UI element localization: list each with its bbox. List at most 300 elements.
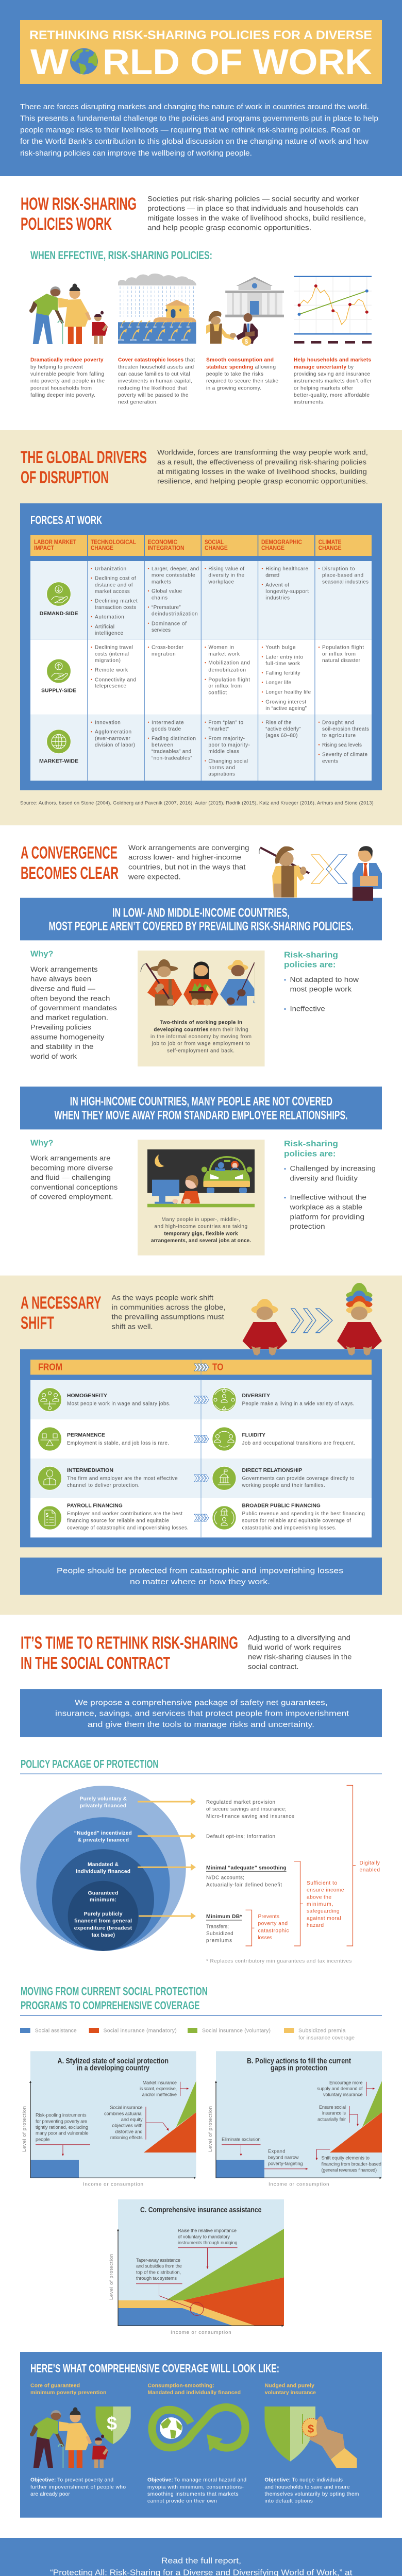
chart C: comprehensive insurance: top of the distribution, — [136, 2269, 181, 2275]
chart A: stylized state: is scant, expensive, — [140, 2086, 177, 2091]
icon: family and shield — [30, 2406, 131, 2468]
title banner: RETHINKING RISK-SHARING POLICIES FOR A DIVERSE — [29, 28, 372, 42]
icon: shield coin hand — [264, 2406, 357, 2468]
objective: core: are already poor — [30, 2492, 70, 2497]
cell: demographic market — [262, 720, 301, 739]
text: necessary shift intro — [111, 1294, 226, 1330]
cell: demographic demand: Advent of — [265, 582, 289, 588]
caption: informal economy: Two-thirds of working people in — [160, 1020, 242, 1026]
row: direct relationship: Governments can provide coverage directly to — [242, 1476, 355, 1481]
icon: bank and handshake — [206, 277, 284, 346]
text: high-income policies are: diversity and fluidity — [290, 1174, 358, 1182]
text: reduce poverty: vulnerable people from falling — [30, 371, 104, 377]
cell: technological market: division of labor) — [95, 742, 135, 748]
chart C: comprehensive insurance: Raise the relative importance — [178, 2228, 237, 2233]
text: high-income policies are — [284, 1140, 376, 1230]
chart B: policy actions — [208, 2051, 382, 2188]
text: policy instruments: Micro-finance saving and insurance — [206, 1814, 295, 1819]
objective: core: further impoverishment of people who — [30, 2484, 126, 2490]
heading: policy package: POLICY PACKAGE OF PROTECTION — [21, 1758, 159, 1771]
text: smooth consumption — [206, 358, 278, 391]
chart B: policy actions: (general revenues financed) — [322, 2167, 377, 2173]
chart A: stylized state: rationing effects — [110, 2135, 143, 2140]
caption: informal economy: earn their living — [210, 1027, 248, 1032]
row label: demand-side: DEMAND-SIDE — [40, 611, 78, 617]
diagram: nested ellipses: tax base) — [92, 1933, 115, 1938]
text: low-income policies are: Risk-sharing — [284, 951, 338, 959]
cell: economic market: Intermediate — [152, 720, 184, 725]
table header row: CLIMATE — [319, 539, 342, 546]
text: low-income policies are: Ineffective — [290, 1005, 325, 1012]
cell: economic supply: migration — [152, 651, 176, 657]
text: necessary shift intro: As the ways people work shift — [111, 1294, 213, 1301]
chart A: stylized state: objectives with — [112, 2123, 143, 2128]
heading: rethink risk-sharing: IT’S TIME TO RETHINK RISK-SHARING — [21, 1633, 238, 1653]
intro paragraph: risk-sharing policies can improve the wellbeing of working people. — [20, 149, 252, 158]
cell: technological supply: costs (internal — [95, 651, 129, 657]
text: manage uncertainty: manage uncertainty — [294, 364, 346, 370]
title banner: W — [30, 42, 69, 82]
brackets: coverage outcomes: Digitally — [360, 1860, 380, 1866]
text: reduce poverty: Dramatically reduce poverty — [30, 358, 104, 363]
text: smooth consumption: stabilize spending — [206, 364, 253, 370]
text: high-income policies are: policies are: — [284, 1149, 336, 1158]
cell: social demand: Rising value of — [208, 566, 244, 572]
icon: night gig scene — [147, 1149, 255, 1207]
cell: social market: norms and — [208, 765, 235, 771]
text: convergence intro: were expected. — [128, 873, 181, 880]
text: rethink intro: Adjusting to a diversifying and — [248, 1634, 350, 1641]
text: necessary shift intro: in communities across the globe, — [111, 1303, 226, 1311]
chart A: stylized state: and equity — [121, 2117, 143, 2122]
cell: technological demand: Artificial — [95, 624, 114, 630]
heading: a convergence: BECOMES CLEAR — [21, 863, 119, 883]
heading: global drivers: OF DISRUPTION — [21, 468, 109, 487]
cell: social supply: Population flight — [208, 677, 250, 683]
icon: infinity globe — [152, 2407, 245, 2451]
cell: economic market: “non-tradeables” — [152, 755, 192, 761]
diagram: nested ellipses: Guaranteed — [88, 1890, 118, 1896]
cell: social supply: Mobilization and — [208, 660, 250, 666]
brackets: coverage outcomes: enabled — [360, 1867, 380, 1873]
text: policy instruments: Actuarially-fair defined benefit — [206, 1882, 282, 1888]
cell: economic demand: services — [152, 628, 171, 633]
diagram: nested ellipses: “Nudged” incentivized — [74, 1831, 132, 1836]
cell: social supply — [205, 645, 250, 696]
heading: forces at work: FORCES AT WORK — [30, 514, 102, 527]
table header row: CHANGE — [205, 546, 228, 552]
row label: demand-side — [40, 582, 78, 617]
table header row: DEMOGRAPHIC — [261, 539, 302, 546]
text: high-income policies are: Challenged by increasing — [290, 1165, 376, 1173]
chart C: comprehensive insurance: of voluntary to mandatory — [178, 2234, 230, 2239]
chart A: stylized state: Social insurance — [110, 2105, 143, 2110]
callout: comprehensive package: insurance, savings, and services that protect people from impoverishment — [55, 1709, 349, 1718]
text: reduce poverty — [30, 358, 105, 398]
heading: a necessary shift: SHIFT — [21, 1313, 54, 1333]
text: manage uncertainty: or helping markets offer — [294, 385, 354, 391]
cell: technological demand: transaction costs — [95, 605, 136, 611]
heading: rethink risk-sharing: IN THE SOCIAL CONTRACT — [21, 1653, 170, 1673]
footnote: * Replaces contributory min guarantees and tax incentives — [206, 1958, 351, 1964]
caption: gig work: Many people in upper-, middle-, — [161, 1217, 240, 1223]
brackets: coverage outcomes: catastrophic — [258, 1928, 289, 1934]
cell: technological demand: Declining cost of — [95, 576, 136, 582]
footer background — [0, 2538, 402, 2576]
cell: climate supply — [319, 645, 364, 664]
cell: social market: From majority- — [208, 736, 245, 741]
caption: gig work: arrangements, and several jobs at once. — [151, 1238, 251, 1244]
text: global drivers intro: at mitigating losses in the wake of livelihood shocks, building — [157, 468, 367, 476]
cell: economic market: Fading distinction — [152, 736, 196, 741]
from to header: TO — [212, 1362, 224, 1372]
text: catastrophic losses: that — [185, 358, 195, 363]
chart A: stylized state: many poor and vulnerable — [36, 2131, 89, 2136]
text: policy instruments: N/DC accounts; — [206, 1875, 244, 1881]
diagram: nested ellipses: individually financed — [76, 1869, 130, 1874]
chart B: policy actions: poverty-targeting — [268, 2161, 303, 2166]
caption: informal economy: job to job or from wage employment to — [152, 1041, 250, 1047]
chart icon: uncertainty lines — [294, 276, 372, 344]
text: why low income: often beyond the reach — [30, 994, 110, 1002]
brackets: coverage outcomes: ensure income — [307, 1888, 344, 1893]
legend: Social insurance (voluntary) — [202, 2027, 271, 2033]
table header row: IMPACT — [34, 546, 54, 552]
brackets: coverage outcomes: hazard — [307, 1923, 324, 1928]
row: intermediation: INTERMEDIATION — [67, 1467, 113, 1473]
row: intermediation — [38, 1466, 178, 1490]
text: why high income: Why? — [30, 1139, 54, 1147]
cell: social demand: diversity in the — [208, 573, 244, 579]
icon: three informal workers — [141, 959, 255, 1006]
icon: shield coin hand: $ — [308, 2422, 314, 2435]
text: catastrophic losses: investments in human capital, — [118, 379, 192, 384]
intro paragraph: for the World Bank’s contribution to this global discussion on the changing nature of work and how — [20, 138, 369, 146]
brackets: coverage outcomes: minimum, — [307, 1902, 333, 1907]
objective: nudge: Objective: — [264, 2478, 291, 2483]
cell: social market: From “plan” to — [208, 720, 243, 725]
panel: from to table — [20, 1346, 382, 1547]
text: read the full report — [50, 2557, 353, 2576]
text: why high income: conventional conceptions — [30, 1183, 118, 1191]
cell: social market — [205, 720, 250, 777]
row: payroll financing: financing source for reliable and equitable — [67, 1518, 169, 1524]
diagram: nested ellipses: & privately financed — [78, 1838, 129, 1843]
row arrows — [194, 1396, 209, 1521]
brackets: coverage outcomes: losses — [258, 1935, 272, 1941]
row: homogeneity: Most people work in wage and salary jobs. — [67, 1401, 171, 1406]
objective: core — [30, 2478, 126, 2497]
table header row — [30, 535, 372, 556]
banner: high-income countries — [20, 1087, 382, 1129]
chart C: comprehensive insurance: C. Comprehensive insurance assistance — [140, 2206, 262, 2214]
arrows: ellipse to policy — [138, 1798, 196, 1920]
cell: technological supply: Connectivity and — [95, 677, 136, 683]
heading: how risk-sharing policies work — [21, 194, 137, 234]
callout: comprehensive package: We propose a comprehensive package of safety net guarantees, — [75, 1698, 328, 1707]
text: manage uncertainty: providing saving and insurance — [294, 371, 370, 377]
cell: climate demand: Disruption to — [322, 566, 355, 572]
text: smooth consumption: in a growing economy. — [206, 385, 261, 391]
row label: market-wide — [39, 730, 78, 764]
cell: demographic demand: longevity-support — [265, 589, 309, 595]
text: why high income: and fluid — challenging — [30, 1174, 111, 1181]
diagram: nested ellipses: expenditure (broadest — [74, 1925, 132, 1931]
text: global drivers intro — [157, 449, 368, 485]
row: direct relationship: working people and their families. — [241, 1483, 325, 1488]
chart B: policy actions: voluntary insurance — [323, 2092, 363, 2097]
text: why high income — [30, 1139, 118, 1201]
intro paragraph: This presents a fundamental challenge to the policies and programs governments put in place to help — [20, 115, 378, 123]
callout: protected from losses: People should be protected from catastrophic and impoverishing losses — [57, 1567, 343, 1575]
text: how policies work intro: protections — in place so that individuals and households can — [147, 205, 358, 212]
row: fluidity: Job and occupational transitions are frequent. — [242, 1440, 355, 1446]
title banner — [20, 20, 382, 84]
callout: protected from losses: no matter where or how they work. — [130, 1578, 270, 1586]
heading: global drivers — [21, 448, 147, 487]
text: low-income policies are: Not adapted to how — [290, 976, 359, 984]
cell: economic demand: markets — [152, 579, 171, 585]
icon: family — [29, 283, 108, 344]
text: convergence intro: Work arrangements are converging — [128, 844, 249, 852]
brackets: coverage outcomes: safeguarding — [307, 1909, 340, 1914]
column heads: minimum poverty prevention — [30, 2389, 106, 2396]
cell: social demand: workplace — [208, 579, 234, 585]
text: manage uncertainty: instruments. — [294, 400, 325, 405]
column heads — [30, 2382, 316, 2396]
cell: social market: poor to majority- — [208, 742, 250, 748]
objective: smoothing — [147, 2478, 246, 2504]
text: catastrophic losses: can cause families to cut vital — [118, 371, 190, 377]
row: direct relationship: DIRECT RELATIONSHIP — [242, 1467, 302, 1473]
text: smooth consumption: people to take the risks — [206, 371, 263, 377]
row: homogeneity: HOMOGENEITY — [67, 1393, 107, 1399]
row label: supply-side — [41, 659, 76, 694]
cell: climate market — [319, 720, 369, 764]
row: payroll financing: $ — [45, 1513, 48, 1518]
cell: economic demand: Global value — [152, 589, 182, 595]
text: catastrophic losses: Cover catastrophic losses — [118, 358, 183, 363]
arrows: shift chevrons — [291, 1309, 332, 1333]
cell: social market: aspirations — [208, 772, 235, 777]
cell: economic market: “tradeables” and — [152, 749, 191, 755]
cell: social supply: or influx from — [208, 684, 242, 689]
diagram: nested ellipses: Mandated & — [88, 1862, 119, 1868]
text: reduce poverty: by helping to prevent — [30, 364, 83, 370]
caption: informal economy — [150, 1020, 252, 1054]
chart B: policy actions: Encourage more — [329, 2080, 363, 2085]
text: why high income: becoming more diverse — [30, 1164, 113, 1172]
cell: demographic demand: Rising healthcare — [265, 566, 308, 572]
objective: nudge — [264, 2478, 359, 2504]
text: convergence intro: countries, but not in the ways that — [128, 863, 246, 871]
chart B: policy actions: Shift equity elements to — [322, 2156, 370, 2161]
cell: economic market — [148, 720, 196, 761]
chart B: policy actions: insurance is — [322, 2111, 346, 2116]
row: diversity — [212, 1388, 354, 1412]
chart A: stylized state: and/or ineffective — [142, 2092, 177, 2097]
brackets: coverage outcomes: against moral — [307, 1916, 341, 1921]
cell: economic demand: more contestable — [152, 573, 195, 579]
diagram: nested ellipses: Purely voluntary & — [80, 1796, 127, 1802]
text: rethink intro — [248, 1634, 351, 1671]
text: high-income policies are: protection — [290, 1223, 325, 1230]
cell: demographic supply: Growing interest — [265, 699, 306, 705]
cell: demographic demand: industries — [265, 596, 290, 601]
icon: rain and house over water — [118, 274, 196, 344]
column heads: Consumption-smoothing: — [147, 2382, 214, 2388]
legend: Social assistance — [35, 2027, 77, 2033]
chart C: comprehensive insurance: Level of protection — [109, 2254, 114, 2300]
chart C: comprehensive insurance: and subsidies from the — [136, 2264, 182, 2269]
text: global drivers intro: Worldwide, forces are transforming the way people work and, — [157, 449, 368, 456]
text: reduce poverty: falling deeper into poverty. — [30, 393, 95, 398]
cell: technological supply — [91, 645, 136, 689]
heading: global drivers: THE GLOBAL DRIVERS — [21, 448, 147, 467]
objective: nudge: To nudge individuals — [292, 2478, 343, 2483]
chart C: comprehensive insurance — [109, 2199, 284, 2335]
cell: social supply: market work — [208, 651, 240, 657]
text: rethink intro: social contract. — [248, 1663, 299, 1671]
text: rethink intro: new risk-sharing clauses in the — [248, 1653, 351, 1661]
callout: comprehensive package — [20, 1689, 382, 1737]
chart B: policy actions: Eliminate exclusion — [222, 2137, 261, 2142]
table header row: INTEGRATION — [147, 546, 185, 552]
cell: economic supply: Cross-border — [152, 645, 183, 651]
text: why low income: Why? — [30, 950, 54, 959]
text: policy instruments: Minimum DB* — [206, 1914, 242, 1920]
chart B: policy actions: Income or consumption — [269, 2182, 329, 2188]
text: catastrophic losses: reducing the likelihood that — [118, 385, 187, 391]
table header row: SOCIAL — [205, 539, 224, 546]
row: fluidity — [212, 1427, 355, 1451]
column heads: Nudged and purely — [265, 2382, 314, 2388]
chart A: stylized state: tightly rationed, excluding — [36, 2125, 88, 2130]
row: direct relationship — [212, 1466, 355, 1490]
callout: comprehensive package: and give them the tools to manage risks and uncertainty. — [88, 1720, 314, 1729]
column heads: Mandated and individually financed — [147, 2389, 241, 2396]
from to header: FROM — [38, 1362, 62, 1372]
row: permanence — [38, 1427, 169, 1451]
cell: climate supply: natural disaster — [322, 658, 361, 664]
text: necessary shift intro: shift as well. — [111, 1323, 153, 1330]
cell: technological supply: telepresence — [95, 684, 126, 689]
text: high-income policies are: Risk-sharing — [284, 1140, 338, 1148]
caption: gig work: temporary gigs, flexible work — [164, 1231, 238, 1236]
cell: demographic supply: Falling fertility — [265, 670, 300, 676]
panel: comprehensive coverage — [20, 2352, 382, 2518]
cell: climate market: Drought and — [322, 720, 354, 725]
text: manage uncertainty: by — [348, 364, 354, 370]
cell: economic demand — [148, 566, 199, 633]
cell: economic market: between — [152, 742, 173, 748]
objective: nudge: and households to save and insure — [264, 2484, 350, 2490]
diagram: nested ellipses: Purely publicly — [84, 1911, 123, 1917]
cell: demographic supply: Longer life — [265, 680, 291, 686]
objective: core: Objective: — [30, 2478, 56, 2483]
objective: core: To prevent poverty and — [57, 2478, 113, 2483]
cell: economic demand: “Premature” — [152, 605, 181, 611]
text: why low income: have always been — [30, 975, 91, 983]
brackets: coverage outcomes: Sufficient to — [307, 1880, 337, 1886]
row: diversity: People make a living in a wide variety of ways. — [242, 1401, 354, 1406]
text: policy instruments — [206, 1800, 295, 1944]
text: reduce poverty: poorest households from — [30, 385, 92, 391]
text: policy instruments: of secure savings and insurance; — [206, 1807, 287, 1812]
heading: moving from current: MOVING FROM CURRENT SOCIAL PROTECTION — [21, 1985, 208, 1998]
cell: social market: “market” — [208, 726, 229, 732]
cell: technological supply: migration) — [95, 658, 121, 664]
cell: technological market: (ever-narrower — [95, 736, 130, 741]
column heads: Core of guaranteed — [30, 2382, 80, 2388]
icon: hands over panel — [252, 1346, 372, 1355]
cell: economic market: goods trade — [152, 726, 181, 732]
heading: moving from current — [20, 1985, 382, 2015]
cell: economic demand: deindustrialization — [152, 612, 198, 617]
table header row: CHANGE — [91, 546, 113, 552]
caption: informal economy: developing countries — [154, 1027, 209, 1032]
chart A: stylized state: Income or consumption — [83, 2182, 143, 2188]
cell: technological market — [91, 720, 135, 748]
row: broader public financing: BROADER PUBLIC FINANCING — [242, 1503, 321, 1509]
heading: how risk-sharing policies work: HOW RISK-SHARING — [21, 194, 137, 214]
brackets: coverage outcomes: above the — [307, 1894, 331, 1900]
caption: gig work — [151, 1217, 251, 1244]
cell: demographic supply: Later entry into — [265, 654, 303, 660]
cell: technological demand: Declining market — [95, 598, 138, 604]
chart A: stylized state: people — [36, 2137, 49, 2142]
diagram: nested ellipses: financed from general — [74, 1919, 132, 1924]
text: why low income: Work arrangements — [30, 965, 98, 973]
legend: for insurance coverage — [298, 2035, 355, 2041]
cell: climate market: soil-erosion threats — [322, 726, 369, 732]
cell: technological supply: Declining travel — [95, 645, 133, 651]
title banner: O — [71, 42, 97, 82]
text: catastrophic losses: threaten household assets and — [118, 364, 194, 370]
brackets: coverage outcomes — [245, 1785, 380, 1946]
text: low-income policies are: most people work — [290, 986, 351, 993]
chart C: comprehensive insurance: instruments through nudging — [178, 2240, 238, 2245]
text: how policies work intro — [147, 195, 366, 232]
chart A: stylized state: Risk-pooling instruments — [36, 2113, 87, 2118]
cell: climate demand: place-based and — [322, 573, 363, 579]
panel: hero background — [0, 0, 402, 176]
diagram: nested ellipses: minimum: — [90, 1897, 116, 1903]
cell: demographic supply: Youth bulge — [265, 645, 296, 651]
text: smooth consumption: allowing — [255, 364, 276, 370]
cell: demographic demand — [262, 566, 309, 601]
cell: demographic supply — [262, 645, 311, 711]
cell: demographic market: “active elderly” — [265, 726, 301, 732]
objective: nudge: themselves voluntarily by opting them — [264, 2492, 359, 2497]
heading: a necessary shift — [21, 1293, 102, 1333]
objective: smoothing: cannot provide on their own — [147, 2499, 217, 2504]
intro paragraph — [20, 103, 378, 158]
text: manage uncertainty: instruments markets don’t offer — [294, 379, 372, 384]
text: high-income policies are: platform for providing — [290, 1213, 364, 1221]
text: read the full report: Read the full report, — [161, 2557, 241, 2566]
heading: a convergence — [21, 843, 119, 883]
cell: climate market: Rising sea levels — [322, 742, 362, 748]
banner: low- and middle-income countries: IN LOW- AND MIDDLE-INCOME COUNTRIES, — [112, 906, 290, 920]
text: smooth consumption: Smooth consumption and — [206, 358, 274, 363]
cell: technological demand: distance and of — [95, 582, 133, 588]
chart C: comprehensive insurance: Income or consumption — [171, 2330, 231, 2335]
cell: technological demand: intelligence — [95, 631, 123, 636]
caption: informal economy: self-employment and back. — [167, 1048, 234, 1054]
chart B: policy actions: financing from broader-based — [322, 2161, 381, 2166]
heading: a convergence: A CONVERGENCE — [21, 843, 118, 863]
